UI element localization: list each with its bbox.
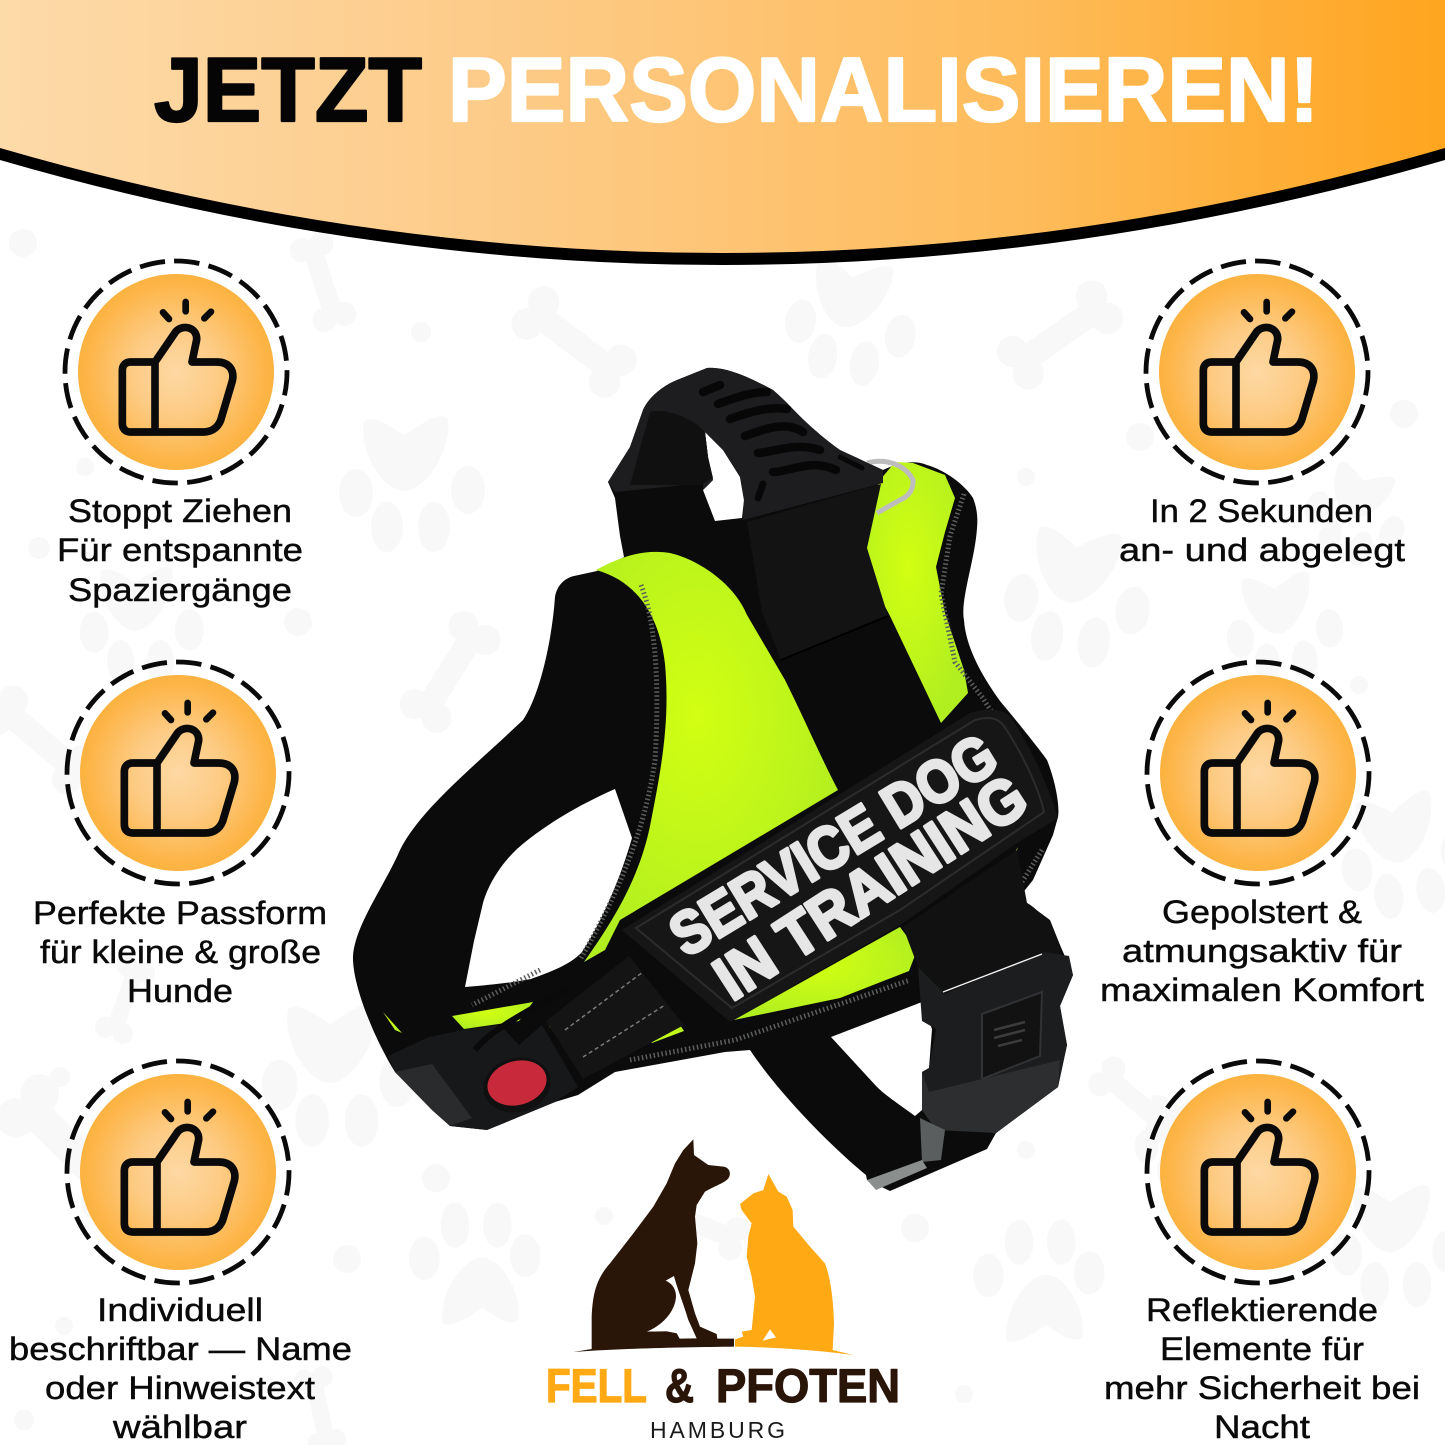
feature text: Perfekte Passform: für kleine & große xyxy=(40,934,321,970)
label patch: IN TRAINING xyxy=(702,762,1039,1014)
feature text: Gepolstert: atmungsaktiv für xyxy=(1122,933,1402,969)
feature text: Reflektierende Elemente xyxy=(1104,1292,1420,1445)
feature text: In 2 Sekunden xyxy=(1119,493,1405,568)
feature text: Perfekte Passform: Hunde xyxy=(127,973,233,1009)
icon: thumbs up 2 xyxy=(65,660,291,886)
feature text: Individuell beschriftbar: wählbar xyxy=(112,1409,247,1445)
feature text: Reflektierende Elemente: mehr Sicherheit bei xyxy=(1104,1370,1420,1406)
icon: thumbs up 3 xyxy=(65,1059,291,1285)
feature text: Reflektierende Elemente: Elemente für xyxy=(1160,1331,1364,1367)
feature text: Gepolstert: maximalen Komfort xyxy=(1100,972,1424,1008)
feature text: Stoppt Ziehen: Für entspannte xyxy=(57,532,303,568)
webbing strap xyxy=(747,484,888,660)
icon: thumbs up 1 xyxy=(63,259,289,485)
handle xyxy=(608,368,883,520)
right buckle xyxy=(867,850,1073,1190)
brand name: & xyxy=(665,1359,694,1412)
feature text: Gepolstert: Gepolstert & xyxy=(1162,894,1362,930)
feature text: Individuell beschriftbar: Individuell xyxy=(97,1292,263,1328)
brand name xyxy=(546,1359,900,1412)
feature text: Perfekte Passform: Perfekte Passform xyxy=(33,895,327,931)
left buckle with red button xyxy=(388,990,578,1130)
title: JETZT xyxy=(154,40,422,141)
feature text: Reflektierende Elemente: Reflektierende xyxy=(1146,1292,1378,1328)
icon: thumbs up 4 xyxy=(1144,259,1370,485)
D-ring xyxy=(867,461,913,513)
harness black body xyxy=(353,368,1073,1191)
feature text: Individuell beschriftbar: oder Hinweistext xyxy=(45,1370,315,1406)
harness product illustration xyxy=(353,368,1073,1191)
feature text: Stoppt Ziehen: Stoppt Ziehen xyxy=(68,493,292,529)
dog silhouette xyxy=(573,1139,734,1352)
feature text: Gepolstert xyxy=(1100,894,1424,1008)
side strap with stitching xyxy=(546,956,684,1079)
feature text: Perfekte Passform xyxy=(33,895,327,1009)
header banner with curved black edge xyxy=(0,0,1445,265)
feature text: Stoppt Ziehen xyxy=(57,493,303,608)
feature text: Individuell beschriftbar: beschriftbar — Name xyxy=(9,1331,352,1367)
stitched trim xyxy=(472,494,1042,1060)
neon green panels xyxy=(383,462,1018,1062)
feature text: In 2 Sekunden: In 2 Sekunden xyxy=(1150,493,1373,529)
title: PERSONALISIEREN! xyxy=(448,40,1319,141)
feature text: Individuell beschriftbar xyxy=(9,1292,352,1445)
cat silhouette xyxy=(735,1174,853,1355)
logo: Fell & Pfoten Hamburg xyxy=(546,1139,900,1443)
brand name: PFOTEN xyxy=(716,1359,900,1412)
feature text: In 2 Sekunden: an- und abgelegt xyxy=(1119,532,1405,568)
feature text: Stoppt Ziehen: Spaziergänge xyxy=(68,572,292,608)
feature text: Reflektierende Elemente: Nacht xyxy=(1214,1409,1310,1445)
label patch: SERVICE DOG xyxy=(658,721,1008,969)
brand name: FELL xyxy=(546,1359,647,1412)
icon: thumbs up 5 xyxy=(1145,660,1371,886)
location: HAMBURG xyxy=(650,1417,785,1443)
icon: thumbs up 6 xyxy=(1145,1059,1371,1285)
